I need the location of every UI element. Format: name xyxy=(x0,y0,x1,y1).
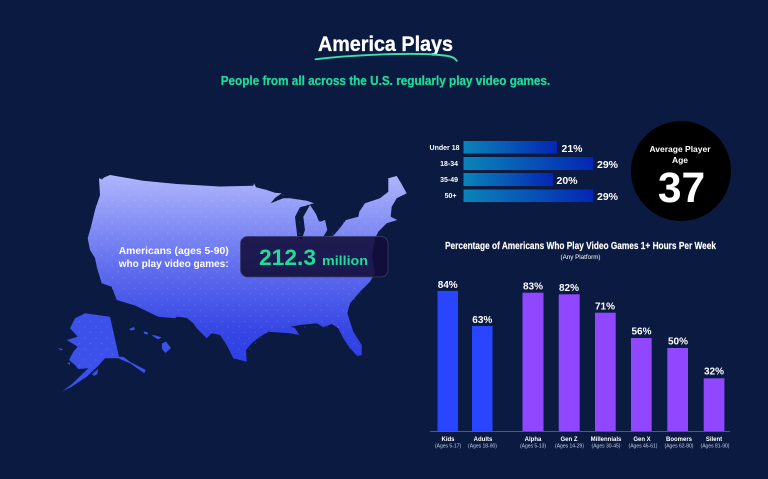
callout value: million xyxy=(322,254,368,268)
bar: Silent: 32% xyxy=(704,366,724,378)
map of the United States xyxy=(58,175,407,392)
bar: Gen Z xyxy=(555,283,584,450)
bar: Gen X: 56% xyxy=(631,326,652,338)
chart heading: Percentage of Americans Who Play Video Games 1+ Hours Per Week xyxy=(445,241,716,252)
title: America Plays xyxy=(318,33,453,56)
bar: Under 18: 21% xyxy=(562,143,583,155)
bar: Gen X: Gen X xyxy=(633,437,651,443)
bar: Kids xyxy=(435,280,461,450)
callout pill xyxy=(240,236,388,277)
bar: Silent: Silent xyxy=(706,437,722,443)
average player age badge: Age xyxy=(672,155,688,165)
age distribution bar chart xyxy=(430,141,619,203)
bar: Kids: (Ages 5-17) xyxy=(435,444,461,450)
bar: Adults xyxy=(468,315,497,450)
bar: 18-34 xyxy=(440,157,619,171)
callout label: who play video games: xyxy=(118,258,229,270)
callout label: Americans (ages 5-90) xyxy=(119,245,229,257)
bar: Adults: Adults xyxy=(474,437,493,443)
Alaska dot texture xyxy=(75,313,119,368)
bar: Silent: (Ages 81-90) xyxy=(701,444,730,450)
bar: Gen Z: (Ages 14-29) xyxy=(555,444,584,450)
callout label xyxy=(118,245,229,270)
bar: 35-49: 35-49 xyxy=(440,177,458,184)
contiguous states xyxy=(88,175,407,362)
bar: Adults: 63% xyxy=(472,315,492,326)
bar: Millennials: 71% xyxy=(595,302,615,312)
bar: 50+ xyxy=(445,190,619,203)
bar: Alpha: (Ages 5-13) xyxy=(520,444,546,450)
bar: Under 18: Under 18 xyxy=(430,145,460,152)
callout: players count xyxy=(118,236,388,277)
bar: 50+: 29% xyxy=(597,191,619,203)
bar: 18-34: 18-34 xyxy=(440,161,458,168)
callout value xyxy=(259,245,368,270)
average player age badge: 37 xyxy=(658,165,705,212)
average player age badge xyxy=(631,121,731,221)
bar: Millennials: (Ages 30-45) xyxy=(592,444,621,450)
bar: Alpha: 83% xyxy=(523,282,543,292)
chart heading xyxy=(445,241,716,261)
baseline axis xyxy=(430,431,730,432)
weekly play bar chart xyxy=(430,280,730,450)
bar: Boomers: 50% xyxy=(668,336,688,348)
Alaska xyxy=(62,313,146,392)
bar: Gen X: (Ages 46-61) xyxy=(629,444,658,450)
bar: Kids: Kids xyxy=(441,437,455,443)
chart heading: (Any Platform) xyxy=(560,255,600,261)
bar: 35-49: 20% xyxy=(556,175,578,187)
bar: Boomers xyxy=(665,336,694,450)
average player age badge: Average Player xyxy=(649,144,711,154)
bar: Adults: (Ages 18-90) xyxy=(468,444,497,450)
callout value: 212.3 xyxy=(259,245,316,270)
map dot texture xyxy=(88,175,407,362)
bar: Millennials xyxy=(591,302,622,450)
bar: Boomers: (Ages 62-80) xyxy=(665,444,694,450)
bar: Gen Z: Gen Z xyxy=(560,437,578,443)
Alaskan islands xyxy=(58,348,98,376)
Hawaii xyxy=(129,327,171,353)
bar: Alpha: Alpha xyxy=(525,437,542,443)
bar: Kids: 84% xyxy=(438,280,458,291)
subtitle: People from all across the U.S. regularly play video games. xyxy=(221,73,550,88)
bar: Under 18 xyxy=(430,141,583,155)
bar: 50+: 50+ xyxy=(445,193,456,200)
bar: Millennials: Millennials xyxy=(591,437,622,443)
bar: 35-49 xyxy=(440,173,578,187)
bar: Boomers: Boomers xyxy=(666,437,693,443)
bar: Alpha xyxy=(520,282,546,450)
bar: Gen Z: 82% xyxy=(559,283,579,294)
bar: Silent xyxy=(701,366,730,450)
bar: Gen X xyxy=(629,326,658,450)
bar: 18-34: 29% xyxy=(597,159,619,171)
